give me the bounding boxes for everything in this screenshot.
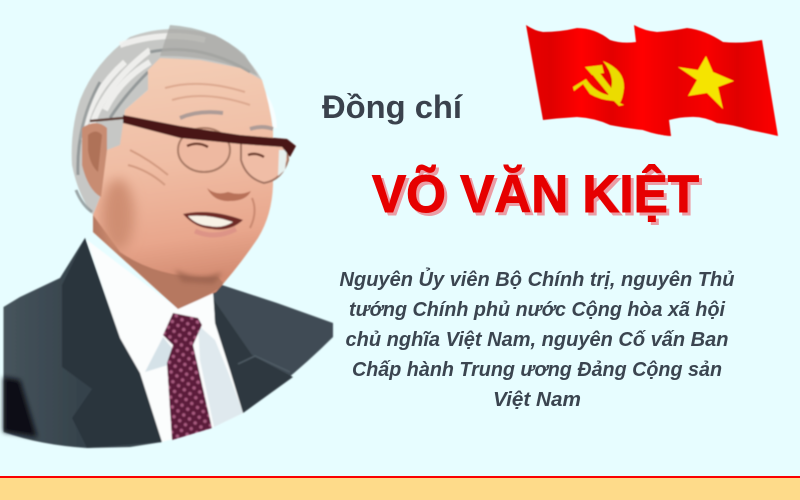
skin — [92, 58, 274, 298]
sickle — [573, 61, 624, 106]
description text: tướng Chính phủ nước Cộng hòa xã hội — [349, 299, 725, 321]
inner ear — [88, 132, 102, 172]
hair dark strands — [76, 50, 250, 212]
flag body right — [630, 25, 778, 136]
eyes — [187, 144, 264, 157]
left lens — [178, 128, 230, 172]
title text: VÕ VĂN KIỆT — [372, 163, 699, 224]
lower left lapel — [72, 338, 162, 448]
description text: chủ nghĩa Việt Nam, nguyên Cố vấn Ban — [346, 329, 728, 351]
tie body — [167, 345, 212, 440]
tie knot — [163, 313, 202, 345]
description text: Chấp hành Trung ương Đảng Cộng sản — [352, 359, 722, 381]
temple highlight — [264, 94, 275, 128]
inner shirt shade — [198, 325, 243, 427]
portrait photo — [4, 25, 333, 448]
left inner shirt shade — [145, 337, 172, 372]
suit jacket right — [213, 285, 333, 413]
left cheek shade — [102, 179, 134, 251]
suit jacket left — [4, 238, 162, 448]
glasses frame top — [123, 115, 296, 157]
forehead lines — [165, 84, 250, 105]
mouth — [183, 212, 243, 230]
face and neck — [92, 58, 274, 310]
cheek wrinkles — [128, 150, 168, 185]
left temple arm — [90, 118, 123, 121]
neck shade — [90, 215, 225, 312]
hammer handle — [592, 72, 619, 101]
description text: Nguyên Ủy viên Bộ Chính trị, nguyên Thủ — [340, 268, 734, 291]
hammer head — [585, 65, 604, 75]
upper left lapel — [62, 238, 120, 389]
title shadow: VÕ VĂN KIỆT — [375, 166, 702, 227]
ear — [82, 123, 107, 197]
flag — [526, 25, 778, 136]
hair light strands — [82, 36, 205, 140]
hair — [72, 29, 262, 215]
nasolabial fold — [250, 198, 255, 228]
heading: Đồng chí: Đồng chí — [322, 89, 463, 125]
description text: Việt Nam — [493, 389, 581, 411]
flag body left — [526, 25, 671, 136]
title: name — [372, 163, 702, 227]
teeth — [188, 216, 233, 227]
bottom band — [0, 476, 800, 500]
shadow on jacket — [4, 377, 37, 437]
lower lip — [195, 229, 236, 235]
chin shade — [175, 270, 222, 284]
hammer and sickle — [573, 61, 624, 106]
lens glare — [278, 150, 287, 176]
right lapel shade — [214, 300, 293, 413]
right lens — [241, 140, 288, 183]
star — [678, 56, 734, 109]
lapel fold — [238, 356, 290, 372]
nose shade — [207, 188, 251, 201]
description text — [340, 268, 734, 411]
hair crown shading — [160, 25, 258, 76]
shirt — [87, 240, 243, 442]
eyebrows — [180, 112, 273, 129]
